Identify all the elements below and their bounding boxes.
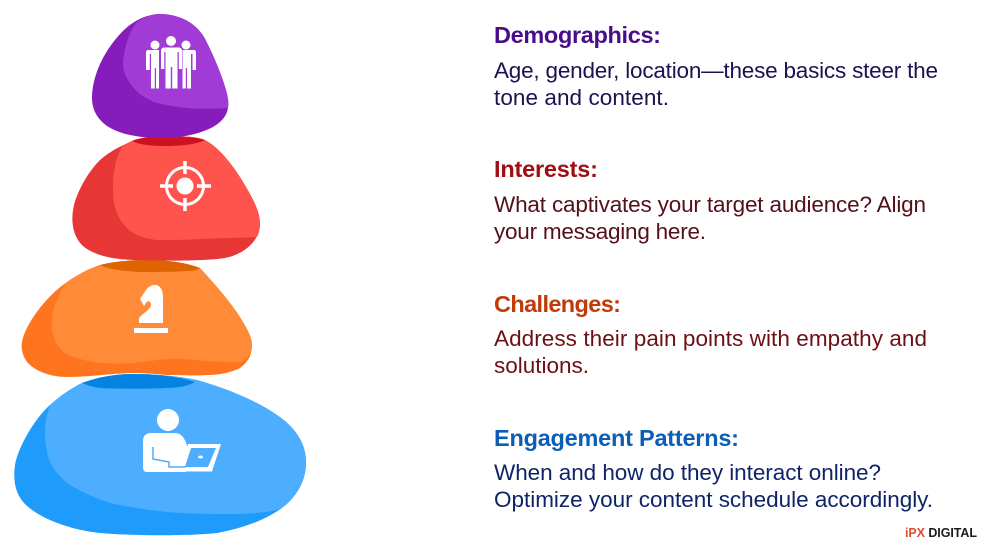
text: demographics description: Age, gender, location—these basics steer the [494, 58, 938, 83]
heading: interests: Interests: [494, 156, 598, 182]
text: engagement description [494, 460, 933, 512]
section: challenges [494, 291, 927, 378]
text: interests description: your messaging here. [494, 219, 706, 244]
section: engagement patterns [494, 425, 933, 512]
left figure [146, 40, 160, 88]
text: demographics description: tone and content. [494, 85, 669, 110]
right figure [182, 40, 196, 88]
stone: orange with chess knight icon [22, 260, 252, 377]
text: engagement description: Optimize your content schedule accordingly. [494, 487, 933, 512]
text: demographics description [494, 58, 938, 110]
section: interests [494, 156, 926, 244]
text: challenges description: Address their pain points with empathy and [494, 326, 927, 351]
heading: engagement patterns: Engagement Patterns: [494, 425, 739, 451]
stone: purple with people icon [92, 14, 228, 138]
icon: target [160, 161, 211, 211]
text: interests description: What captivates your target audience? Align [494, 192, 926, 217]
icon: chess knight [134, 285, 168, 333]
stone: red with target icon [72, 136, 260, 261]
logo: iPX Digital: iPX DIGITAL [905, 526, 977, 540]
icon: group of people [146, 36, 196, 88]
centre figure [161, 36, 182, 88]
heading: demographics: Demographics: [494, 22, 661, 48]
section: demographics [494, 22, 938, 110]
text: challenges description: solutions. [494, 353, 589, 378]
text: engagement description: When and how do they interact online? [494, 460, 881, 485]
text: interests description [494, 192, 926, 244]
text: challenges description [494, 326, 927, 378]
icon: person at laptop [143, 409, 221, 472]
heading: challenges: Challenges: [494, 291, 621, 317]
stone: blue with laptop user icon [14, 374, 306, 535]
